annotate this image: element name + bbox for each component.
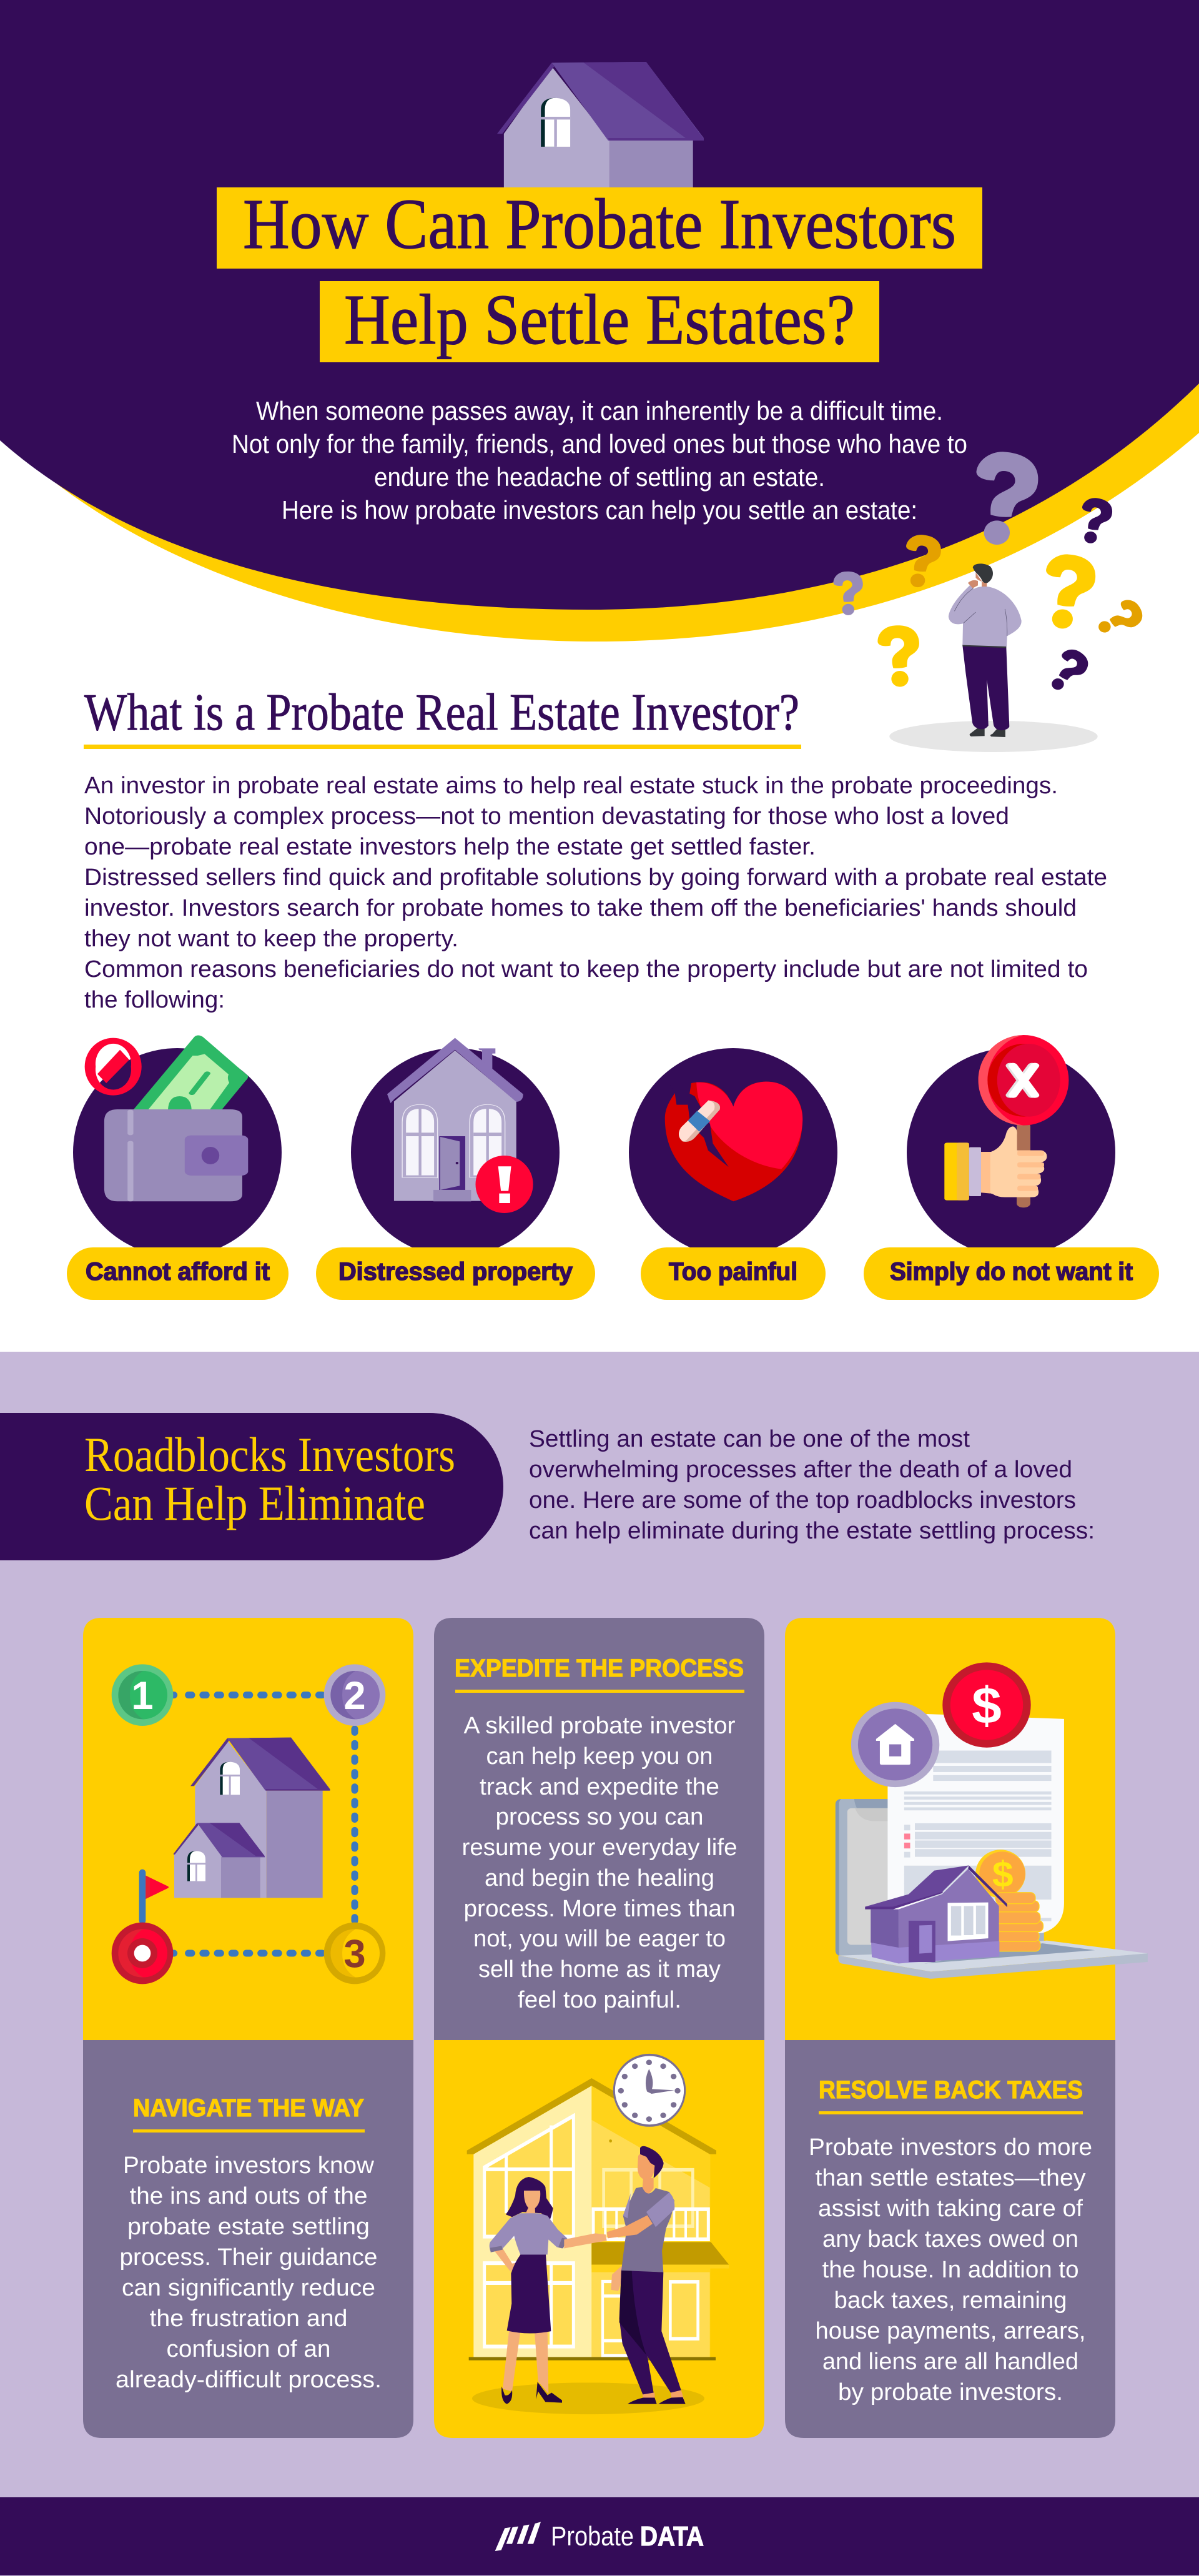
text block: roadblocks intro: can help eliminate during the estate settling process: bbox=[529, 1518, 1095, 1544]
text: expedite the process body: and begin the healing bbox=[485, 1865, 714, 1891]
title: How Can Probate Investors bbox=[243, 184, 956, 264]
banner: roadblocks heading bbox=[0, 1413, 503, 1560]
icon: purple house bbox=[865, 1865, 1007, 1963]
label pill: Too painful bbox=[669, 1258, 797, 1286]
text block: investor description: the following: bbox=[84, 987, 225, 1013]
intro text: When someone passes away, it can inherently be a difficult time. bbox=[256, 396, 943, 425]
text: navigate the way body bbox=[116, 2152, 382, 2393]
intro text bbox=[232, 396, 967, 525]
text block: roadblocks intro: one. Here are some of the top roadblocks investors bbox=[529, 1487, 1076, 1513]
panel: too painful bbox=[629, 1048, 837, 1300]
text: resolve back taxes body: the house. In addition to bbox=[822, 2257, 1079, 2283]
panel: simply do not want it bbox=[864, 1035, 1159, 1300]
text: expedite the process body: can help keep you on bbox=[486, 1743, 713, 1770]
label pill: Simply do not want it bbox=[890, 1258, 1133, 1286]
text: resolve back taxes body: than settle estates—they bbox=[816, 2165, 1085, 2191]
text block: roadblocks intro: overwhelming processes after the death of a loved bbox=[529, 1457, 1072, 1483]
title bbox=[217, 184, 982, 362]
step 1 marker: 1 bbox=[131, 1674, 154, 1718]
icon: distressed house with alert bbox=[387, 1038, 533, 1213]
icon: clock bbox=[614, 2055, 685, 2126]
heading: expedite the process: EXPEDITE THE PROCESS bbox=[455, 1655, 744, 1682]
label pill: Cannot afford it bbox=[86, 1258, 270, 1286]
text: navigate the way body: confusion of an bbox=[166, 2336, 331, 2362]
text: expedite the process body: sell the home as it may bbox=[478, 1956, 721, 1983]
start marker bbox=[112, 1923, 173, 1984]
heading: expedite the process bbox=[455, 1655, 744, 1693]
icon: header house bbox=[497, 62, 704, 187]
text block: investor description bbox=[84, 773, 1107, 1013]
icon: wallet with banknote and prohibition sign bbox=[85, 1035, 248, 1201]
text block: investor description: investor. Investors search for probate homes to take them off the beneficiaries' hands should bbox=[84, 895, 1077, 921]
text: resolve back taxes body: and liens are all handled bbox=[822, 2349, 1078, 2375]
step 3 marker bbox=[324, 1923, 385, 1984]
text: expedite the process body bbox=[462, 1713, 737, 2013]
text block: investor description: they not want to keep the property. bbox=[84, 926, 458, 952]
heading: resolve back taxes: RESOLVE BACK TAXES bbox=[819, 2076, 1083, 2104]
step 3 marker: 3 bbox=[343, 1932, 366, 1976]
text: navigate the way body: can significantly reduce bbox=[122, 2275, 375, 2301]
banner: roadblocks heading: Can Help Eliminate bbox=[84, 1476, 425, 1530]
logo wordmark bbox=[551, 2521, 704, 2552]
title: Help Settle Estates? bbox=[344, 280, 855, 359]
text: resolve back taxes body: assist with taking care of bbox=[818, 2196, 1083, 2222]
text: expedite the process body: feel too painful. bbox=[518, 1987, 681, 2013]
panel: distressed property bbox=[316, 1038, 595, 1300]
text: expedite the process body: process. More times than bbox=[463, 1896, 736, 1922]
icon: hand holding stop sign bbox=[944, 1035, 1068, 1207]
heading: navigate the way bbox=[133, 2094, 365, 2133]
text: navigate the way body: the frustration and bbox=[150, 2306, 347, 2332]
label pill bbox=[641, 1247, 826, 1300]
text: expedite the process body: A skilled probate investor bbox=[463, 1713, 736, 1739]
text block: investor description: Notoriously a complex process—not to mention devastating for those who lost a loved bbox=[84, 803, 1009, 830]
text: expedite the process body: resume your everyday life bbox=[462, 1835, 737, 1861]
text block: roadblocks intro bbox=[529, 1426, 1095, 1544]
text: resolve back taxes body: Probate investors do more bbox=[809, 2134, 1092, 2161]
step 1 marker bbox=[112, 1664, 173, 1726]
heading: resolve back taxes bbox=[819, 2076, 1083, 2114]
figure: man bbox=[607, 2146, 686, 2404]
intro text: Not only for the family, friends, and loved ones but those who have to bbox=[232, 429, 967, 458]
text: resolve back taxes body: house payments, arrears, bbox=[816, 2318, 1085, 2344]
illustration: handshake in front of house with clock bbox=[467, 2055, 729, 2414]
text: navigate the way body: the ins and outs of the bbox=[130, 2183, 367, 2209]
heading: what is a probate real estate investor: What is a Probate Real Estate Investor? bbox=[84, 683, 799, 741]
text block: investor description: An investor in probate real estate aims to help real estate stuck in the probate proceedings. bbox=[84, 773, 1058, 799]
banner: roadblocks heading: Roadblocks Investors bbox=[84, 1427, 455, 1482]
icon: dollar badge: $ bbox=[972, 1677, 1002, 1734]
text: navigate the way body: probate estate settling bbox=[127, 2214, 370, 2240]
panel: navigate the way bbox=[83, 1618, 413, 2438]
illustration: thinking man with question marks bbox=[832, 452, 1148, 752]
text: navigate the way body: process. Their guidance bbox=[120, 2244, 377, 2271]
text: expedite the process body: track and expedite the bbox=[480, 1774, 719, 1800]
text block: investor description: one—probate real estate investors help the estate get settled faster. bbox=[84, 834, 816, 860]
text: resolve back taxes body bbox=[809, 2134, 1092, 2405]
panel: resolve back taxes bbox=[785, 1618, 1148, 2438]
step 2 marker: 2 bbox=[343, 1674, 366, 1718]
icon: broken heart with bandage bbox=[665, 1082, 802, 1201]
icon: Probate Data logo mark bbox=[495, 2522, 541, 2551]
panel: roadblocks section background bbox=[0, 1352, 1199, 2576]
label pill bbox=[316, 1247, 595, 1300]
panel: expedite the process bbox=[434, 1618, 764, 2438]
illustration: route map around houses bbox=[112, 1664, 385, 1984]
intro text: endure the headache of settling an estate. bbox=[374, 462, 825, 492]
panel: header background bbox=[0, 0, 1199, 642]
label pill bbox=[864, 1247, 1159, 1300]
heading: navigate the way: NAVIGATE THE WAY bbox=[133, 2094, 364, 2122]
icon: gold coins: $ bbox=[992, 1854, 1014, 1895]
panel: cannot afford it bbox=[67, 1035, 289, 1300]
text: resolve back taxes body: by probate investors. bbox=[838, 2379, 1063, 2405]
text: expedite the process body: not, you will be eager to bbox=[473, 1926, 726, 1952]
text: navigate the way body: already-difficult process. bbox=[116, 2367, 382, 2393]
text: resolve back taxes body: any back taxes owed on bbox=[822, 2226, 1078, 2252]
label pill bbox=[67, 1247, 289, 1300]
icon: dollar badge bbox=[942, 1662, 1031, 1748]
icon: home badge bbox=[851, 1702, 939, 1787]
footer bbox=[0, 2497, 1199, 2575]
text: resolve back taxes body: back taxes, remaining bbox=[834, 2287, 1067, 2314]
step 2 marker bbox=[324, 1664, 385, 1726]
label pill: Distressed property bbox=[338, 1258, 573, 1286]
text block: investor description: Distressed sellers find quick and profitable solutions by going forward with a probate real estate bbox=[84, 864, 1107, 891]
illustration: laptop, tax document, house and coins bbox=[836, 1662, 1148, 1979]
text: expedite the process body: process so you can bbox=[496, 1804, 703, 1830]
intro text: Here is how probate investors can help you settle an estate: bbox=[282, 495, 917, 525]
text: navigate the way body: Probate investors know bbox=[123, 2152, 375, 2179]
logo wordmark: Probate bbox=[551, 2521, 634, 2552]
icon: gold coins bbox=[975, 1850, 1043, 1951]
figure: woman bbox=[490, 2177, 607, 2404]
logo wordmark: DATA bbox=[640, 2521, 704, 2552]
text block: roadblocks intro: Settling an estate can be one of the most bbox=[529, 1426, 970, 1452]
text block: investor description: Common reasons beneficiaries do not want to keep the property include but are not limited to bbox=[84, 956, 1088, 983]
